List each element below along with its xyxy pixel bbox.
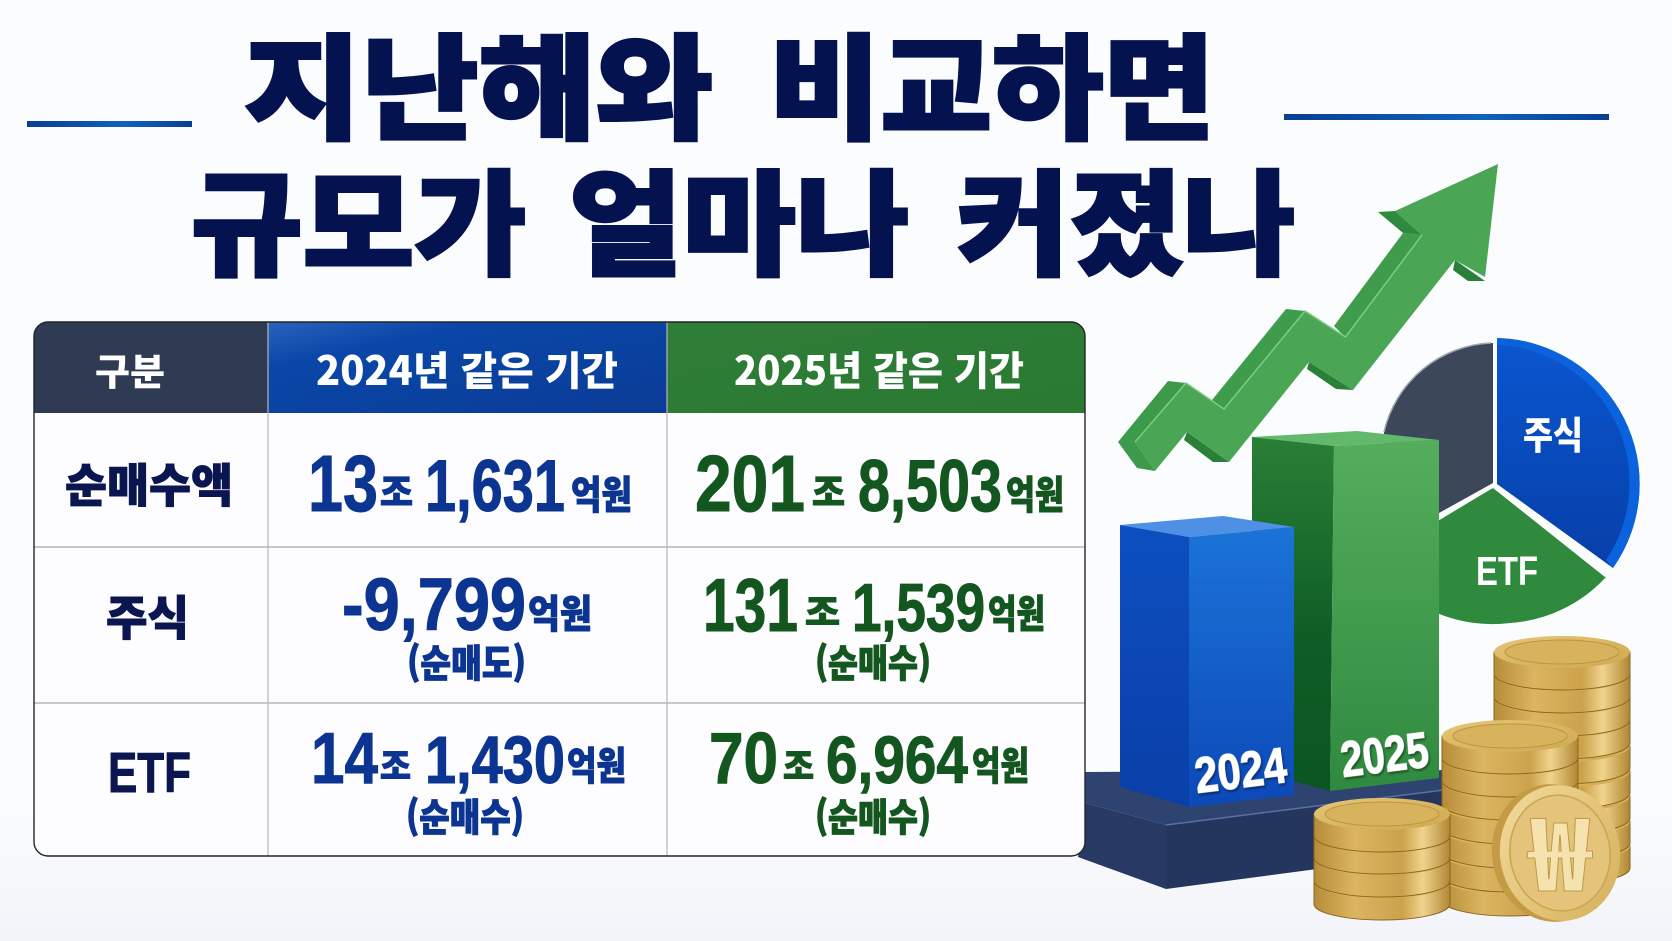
row label: ETF: ETF (108, 741, 191, 805)
value: stocks 2025: 억원 (988, 584, 1045, 640)
illustration: green 2025 bar (1252, 431, 1439, 791)
pie slice: stocks (1497, 338, 1640, 568)
value: net buying 2024: 13 (308, 439, 378, 528)
header: 2024: 2024년 같은 기간 (316, 339, 618, 397)
title: 커졌나 (957, 134, 1295, 299)
value: ETF 2024: 1,430 (425, 723, 565, 798)
icon: won coin: ₩ (1527, 775, 1593, 920)
illustration: front coin stack (1314, 798, 1450, 920)
title: 비교하면 (769, 0, 1215, 163)
illustration: chart base platform (1078, 770, 1460, 889)
value: stocks 2025: (순매수) (815, 633, 931, 688)
bar label 2025: 2025 (1338, 722, 1432, 788)
value: net buying 2024: 조 (380, 464, 413, 516)
value: ETF 2024: 억원 (567, 736, 626, 792)
decorative title rule right (1284, 114, 1609, 120)
value: stocks 2025: 조 (805, 585, 840, 636)
table header row (34, 322, 1085, 413)
value: stocks 2024: (순매도) (407, 633, 526, 688)
icon: won coin (1483, 775, 1629, 930)
illustration: pie chart (1380, 338, 1640, 624)
value: ETF 2024: 14 (311, 719, 378, 799)
row label: net buying: 순매수액 (65, 450, 233, 516)
value: stocks 2025: 1,539 (852, 570, 985, 646)
value: ETF 2024: 조 (380, 739, 411, 790)
value: ETF 2025: 억원 (972, 736, 1029, 792)
value: stocks 2025 (703, 563, 1045, 688)
value: net buying 2025: 201 (695, 439, 805, 528)
value: stocks 2025: 131 (703, 563, 798, 647)
header: 2025: 2025년 같은 기간 (734, 339, 1024, 397)
illustration: middle coin stack (1442, 720, 1578, 916)
value: stocks 2024: 억원 (528, 584, 592, 640)
value: net buying 2025: 8,503 (858, 446, 1002, 527)
row label: stocks: 주식 (106, 580, 189, 649)
bar label 2024: 2024 (1192, 737, 1290, 804)
value: ETF 2024 (311, 719, 626, 842)
value: ETF 2025: 70 (709, 719, 778, 799)
value: stocks 2024: -9,799 (342, 563, 526, 646)
title: 얼마나 (569, 134, 909, 299)
value: stocks 2024 (342, 563, 592, 688)
value: ETF 2024: (순매수) (406, 787, 524, 842)
illustration: back coin stack (1494, 636, 1630, 884)
pie label: stocks: 주식 (1523, 405, 1583, 460)
value: ETF 2025: 조 (783, 739, 814, 790)
panel: comparison table (34, 322, 1085, 856)
pie slice: dark (1384, 343, 1493, 540)
value: net buying 2024: 1,631 (425, 446, 565, 527)
value: net buying 2025: 억원 (1006, 465, 1064, 521)
illustration: blue 2024 bar (1120, 516, 1294, 807)
title: 지난해와 (244, 0, 713, 163)
illustration: green growth arrow (1118, 164, 1498, 471)
value: ETF 2025: 6,964 (826, 723, 968, 798)
title: 규모가 (191, 134, 526, 299)
value: ETF 2025 (709, 719, 1029, 842)
value: ETF 2025: (순매수) (815, 787, 931, 842)
pie slice: ETF (1380, 488, 1606, 624)
value: net buying 2024 (308, 439, 632, 528)
title (191, 0, 1295, 299)
value: net buying 2024: 억원 (571, 465, 632, 521)
header: category: 구분 (95, 342, 165, 396)
value: net buying 2025: 조 (812, 464, 845, 516)
decorative title rule left (27, 121, 192, 127)
value: net buying 2025 (695, 439, 1064, 528)
pie label: ETF: ETF (1476, 548, 1538, 594)
